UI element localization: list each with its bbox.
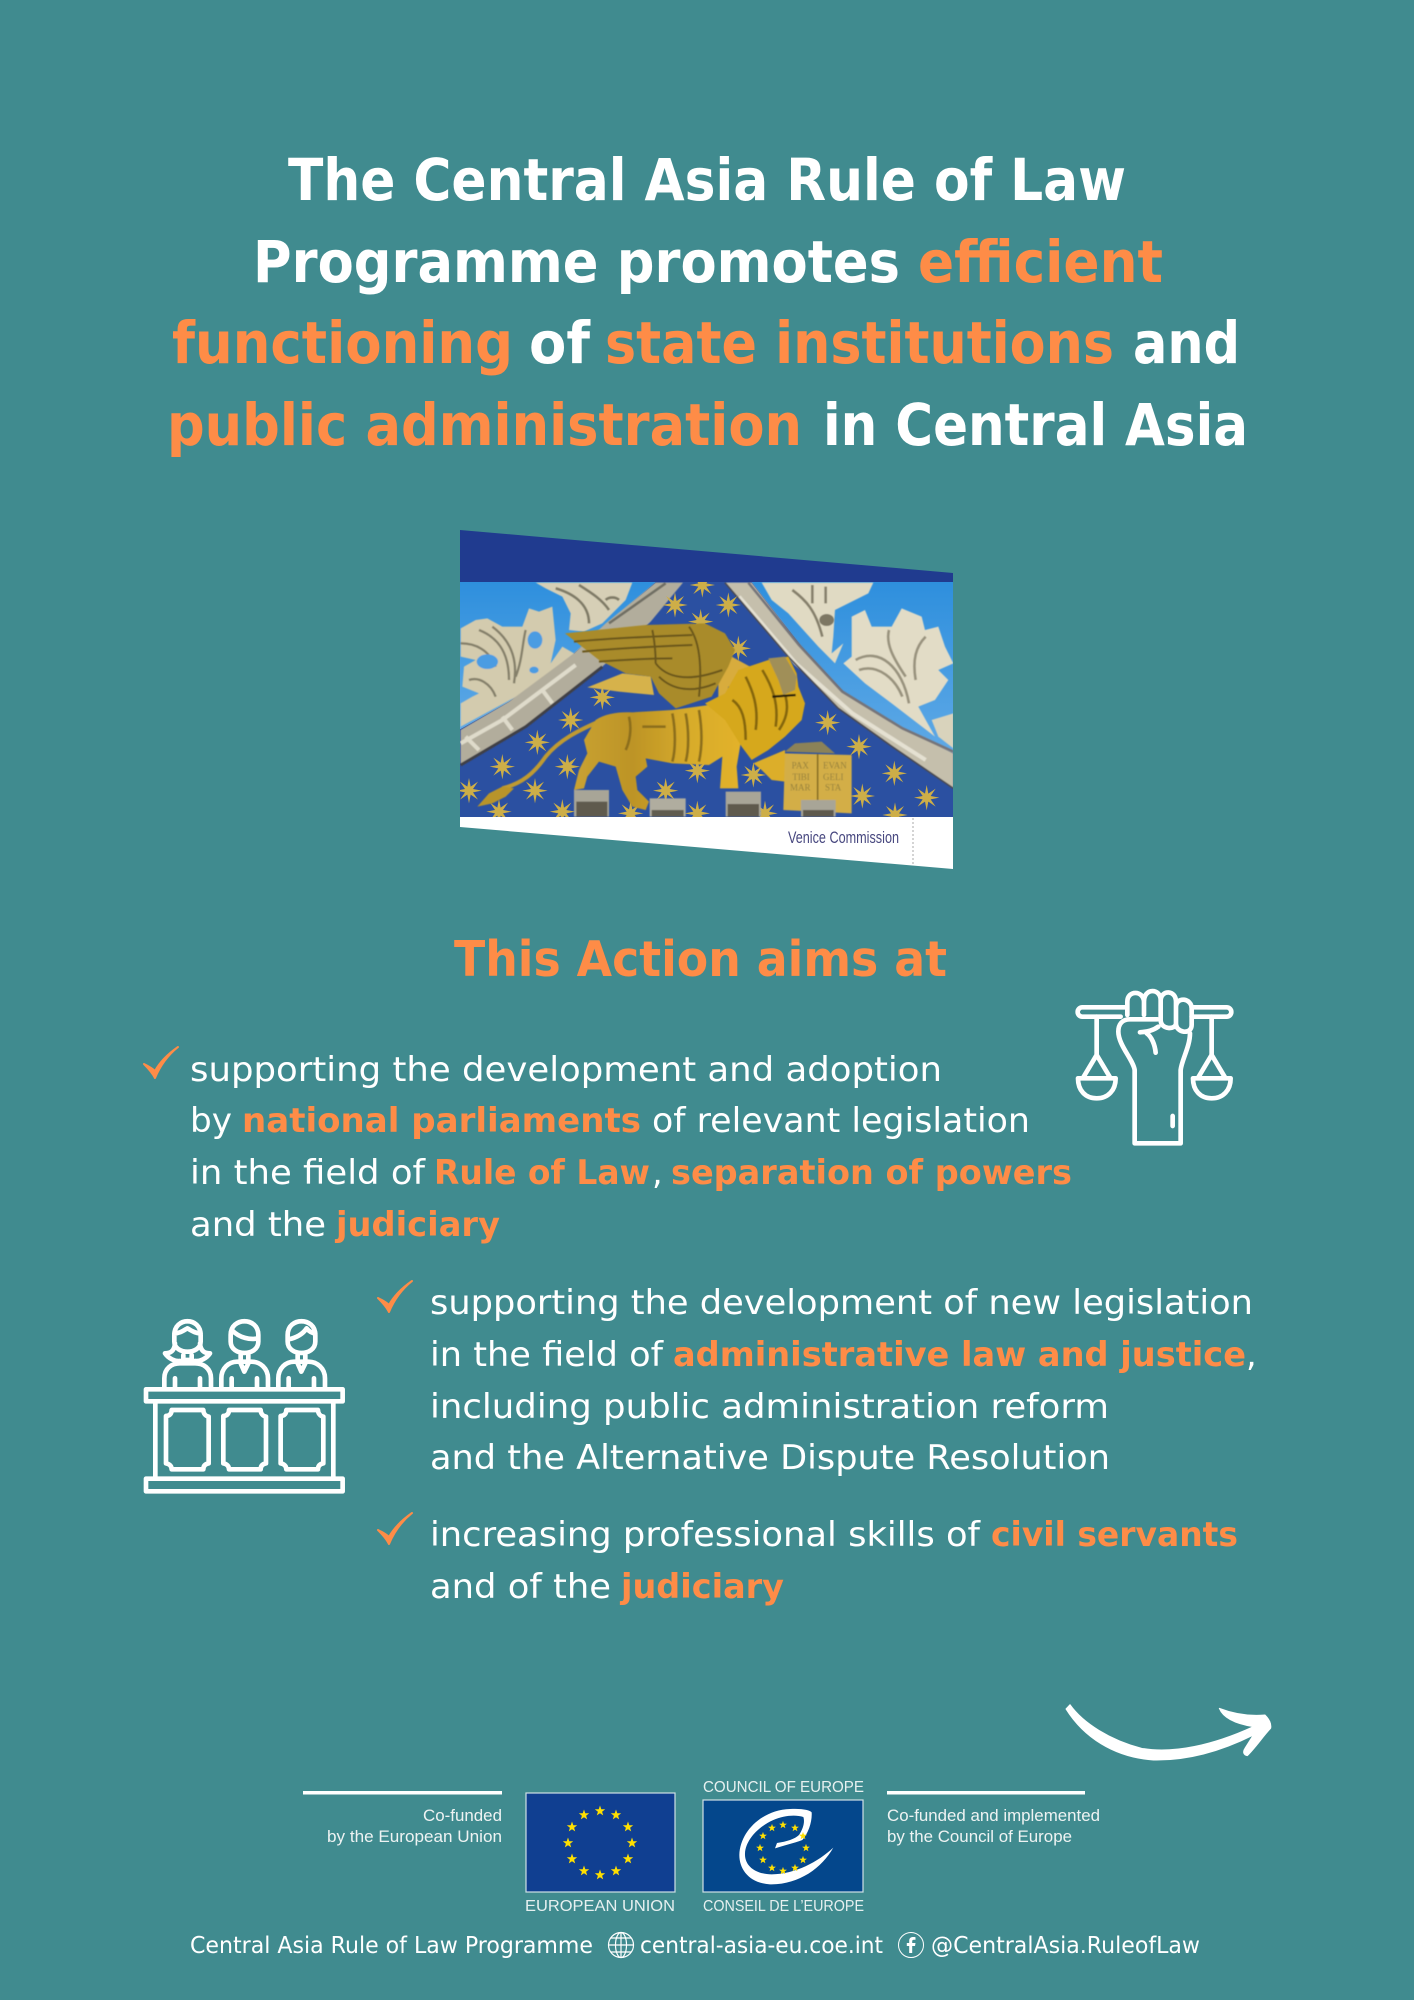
cover photo: winged lion: GELI <box>823 772 843 782</box>
cover photo: winged lion: EVAN <box>823 760 847 770</box>
co-funding note: European Union <box>303 1791 502 1846</box>
cover footer band <box>460 817 953 869</box>
mane <box>705 657 805 760</box>
title: public administration <box>167 391 802 459</box>
check mark 1 <box>144 1047 178 1078</box>
aim 1: national parliaments: supporting the development and adoption <box>190 1050 942 1089</box>
aim 1: national parliaments: in the field of <box>190 1153 426 1192</box>
co-funding note: European Union: Co-funded <box>423 1807 502 1825</box>
icon: fist holding scales <box>1078 991 1231 1143</box>
aim 2: administrative law and justice: and the Alternative Dispute Resolution <box>430 1438 1110 1477</box>
lion body <box>574 700 742 810</box>
title: Programme promotes <box>253 228 900 296</box>
icon: globe <box>608 1932 634 1958</box>
cover photo: winged lion: PAX <box>792 760 809 770</box>
logo: Council of Europe flag: CONSEIL DE L’EUROPE <box>703 1898 864 1915</box>
icon: facebook <box>898 1932 924 1958</box>
cover photo: winged lion: MAR <box>790 783 810 793</box>
aim 3: civil servants and judiciary: civil servants <box>991 1515 1238 1554</box>
tail <box>502 720 602 788</box>
heading: This Action aims at: This Action aims at <box>454 931 947 988</box>
aim 3: civil servants and judiciary: and of the <box>430 1567 611 1606</box>
footer contact line <box>190 1932 1200 1959</box>
cover photo: winged lion: STA <box>825 783 842 793</box>
aim 1: national parliaments: , <box>652 1153 663 1192</box>
cover publisher name: Venice Commission <box>788 828 899 847</box>
title: state institutions <box>605 309 1114 377</box>
aim 1: national parliaments: and the <box>190 1205 326 1244</box>
title: The Central Asia Rule of Law <box>288 146 1126 214</box>
co-funding note: Council of Europe: Co-funded and implemented <box>887 1807 1100 1825</box>
aim 2: administrative law and justice: in the field of <box>430 1335 664 1374</box>
cover photo: winged lion: TIBI <box>792 772 810 782</box>
logo: European Union flag: EUROPEAN UNION <box>525 1898 675 1915</box>
acanthus leaves <box>461 607 574 727</box>
book <box>785 742 835 753</box>
logo: Council of Europe flag <box>703 1779 864 1915</box>
aim 1: national parliaments <box>144 1047 1072 1244</box>
aim 1: national parliaments: Rule of Law <box>434 1153 650 1192</box>
footer contact line: @CentralAsia.RuleofLaw <box>931 1933 1200 1959</box>
title: efficient <box>918 228 1163 296</box>
title <box>167 146 1248 459</box>
mosaic stars <box>456 572 939 828</box>
cover header band <box>460 530 953 582</box>
aim 2: administrative law and justice: supporting the development of new legislation <box>430 1283 1253 1322</box>
footer contact line: central-asia-eu.coe.int <box>640 1933 883 1959</box>
title: and <box>1133 309 1240 377</box>
footer contact line: Central Asia Rule of Law Programme <box>190 1933 593 1959</box>
aim 3: civil servants and judiciary <box>378 1513 1238 1606</box>
aim 3: civil servants and judiciary: increasing professional skills of <box>430 1515 981 1554</box>
icon: panel of three judges at a bench <box>146 1321 343 1491</box>
co-funding note: Council of Europe <box>887 1791 1100 1846</box>
aim 1: national parliaments: by <box>190 1101 232 1140</box>
arrow <box>1066 1705 1271 1760</box>
aim 1: national parliaments: national parliaments <box>242 1101 641 1140</box>
title: in Central Asia <box>823 391 1248 459</box>
title: functioning <box>172 309 513 377</box>
co-funding note: Council of Europe: by the Council of Europe <box>887 1828 1072 1846</box>
logo: European Union flag <box>525 1793 675 1915</box>
co-funding note: European Union: by the European Union <box>327 1828 502 1846</box>
check mark 3 <box>378 1513 412 1544</box>
aim 2: administrative law and justice: including public administration reform <box>430 1387 1109 1426</box>
paw <box>753 750 785 782</box>
aim 1: national parliaments: separation of powers <box>671 1153 1072 1192</box>
pedestals <box>574 790 609 817</box>
aim 2: administrative law and justice: , <box>1246 1335 1257 1374</box>
aim 1: national parliaments: judiciary <box>334 1205 500 1244</box>
logo: Council of Europe flag: COUNCIL OF EUROPE <box>703 1779 864 1796</box>
cover photo: winged lion <box>456 572 954 828</box>
publication cover: Venice Commission <box>456 530 954 869</box>
wings <box>587 673 654 695</box>
aim 2: administrative law and justice: administrative law and justice <box>673 1335 1246 1374</box>
aim 3: civil servants and judiciary: judiciary <box>619 1567 784 1606</box>
aim 2: administrative law and justice <box>378 1281 1257 1477</box>
check mark 2 <box>378 1281 412 1312</box>
stone arches <box>461 583 683 765</box>
aim 1: national parliaments: of relevant legislation <box>652 1101 1030 1140</box>
title: of <box>529 309 591 377</box>
